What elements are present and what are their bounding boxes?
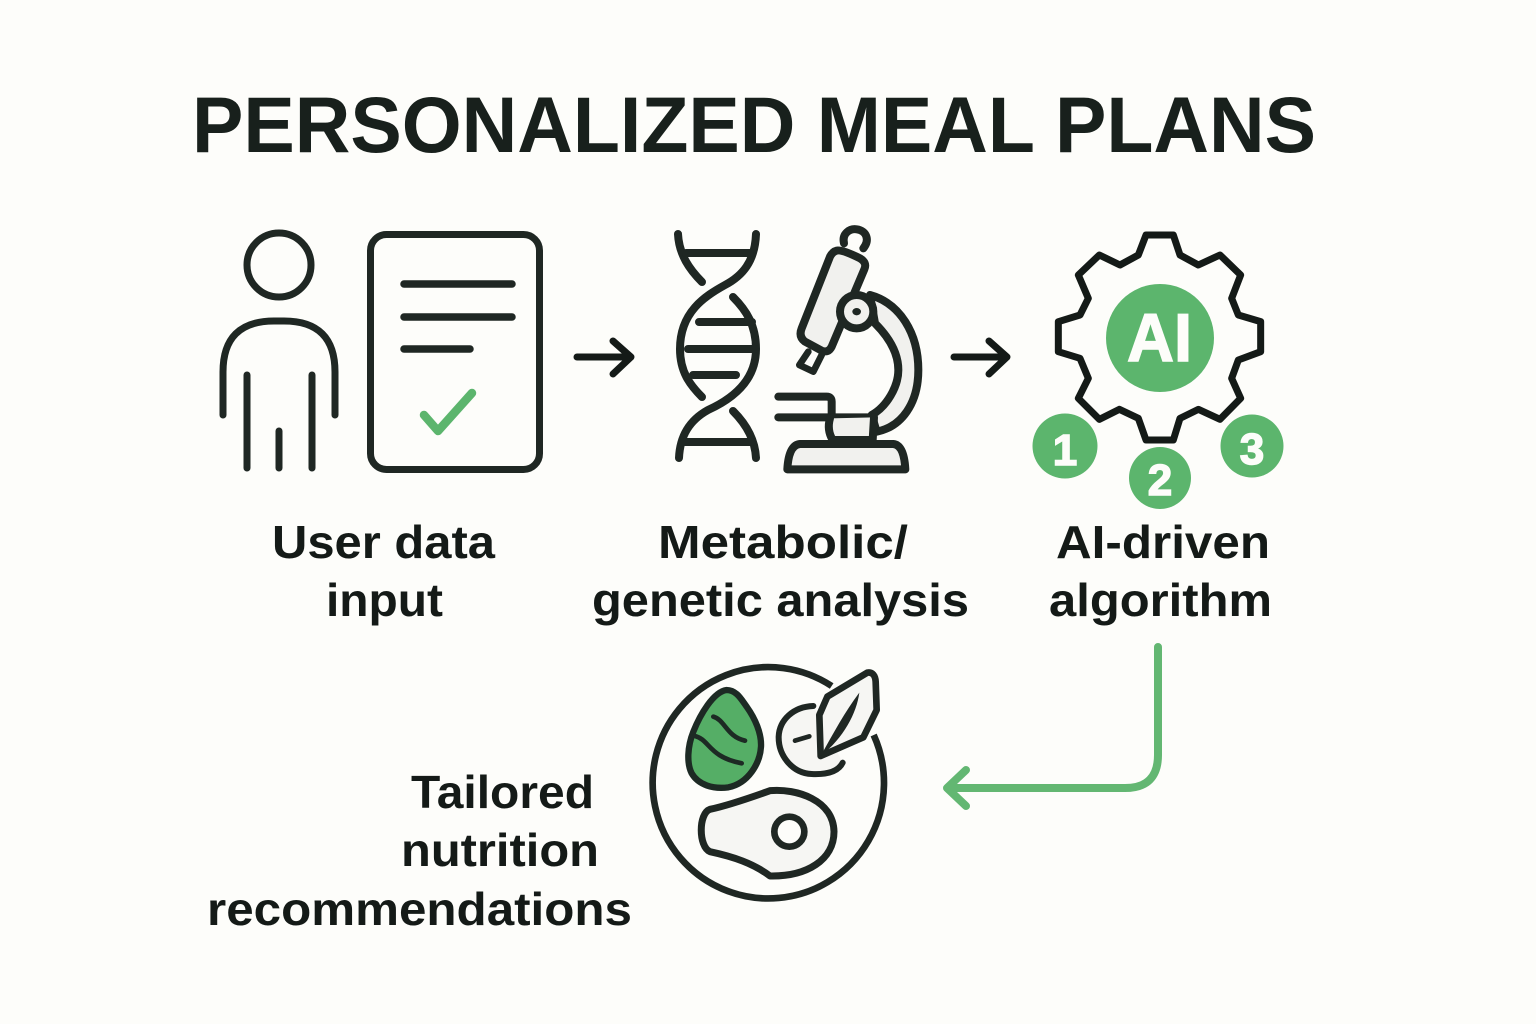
- label: user data input: [272, 516, 495, 626]
- label: tailored nutrition recommendations: nutrition: [401, 824, 599, 876]
- gear outline: [1058, 235, 1261, 440]
- label: AI-driven algorithm: [1049, 516, 1272, 626]
- green leaf: [688, 690, 761, 788]
- icon: microscope: [778, 229, 918, 469]
- title: PERSONALIZED MEAL PLANS: [192, 80, 1316, 169]
- step badges 1 2 3: [1032, 414, 1284, 509]
- label: tailored nutrition recommendations: [207, 766, 632, 935]
- label: AI-driven algorithm: AI-driven: [1056, 516, 1270, 568]
- step badges 1 2 3: 3: [1240, 425, 1264, 474]
- label: metabolic genetic analysis: Metabolic/: [658, 516, 908, 568]
- meat cut: [701, 790, 834, 876]
- leaf veins: [695, 717, 745, 763]
- label: metabolic genetic analysis: [592, 516, 969, 626]
- icon: AI gear: [1058, 235, 1261, 440]
- label: metabolic genetic analysis: genetic analysis: [592, 574, 969, 626]
- round fruit: [779, 706, 843, 774]
- label: user data input: input: [326, 574, 443, 626]
- label: AI-driven algorithm: algorithm: [1049, 574, 1272, 626]
- arrow: user data to analysis: [577, 341, 631, 374]
- small leaf: [819, 673, 877, 756]
- icon: meal plate: [653, 667, 884, 898]
- arrow: algorithm to recommendations: [947, 647, 1158, 806]
- icon: document with checkmark: [370, 234, 540, 470]
- icon: person: [223, 233, 335, 468]
- label: tailored nutrition recommendations: recommendations: [207, 883, 632, 935]
- step badges 1 2 3: 2: [1148, 456, 1172, 505]
- label: tailored nutrition recommendations: Tailored: [411, 766, 594, 818]
- label: user data input: User data: [272, 516, 495, 568]
- arrow: analysis to algorithm: [954, 341, 1007, 374]
- plate rim: [653, 667, 884, 898]
- step badges 1 2 3: 1: [1053, 426, 1077, 475]
- icon: DNA helix: [678, 234, 756, 458]
- AI badge: AI: [1127, 300, 1192, 376]
- AI badge: [1106, 284, 1214, 392]
